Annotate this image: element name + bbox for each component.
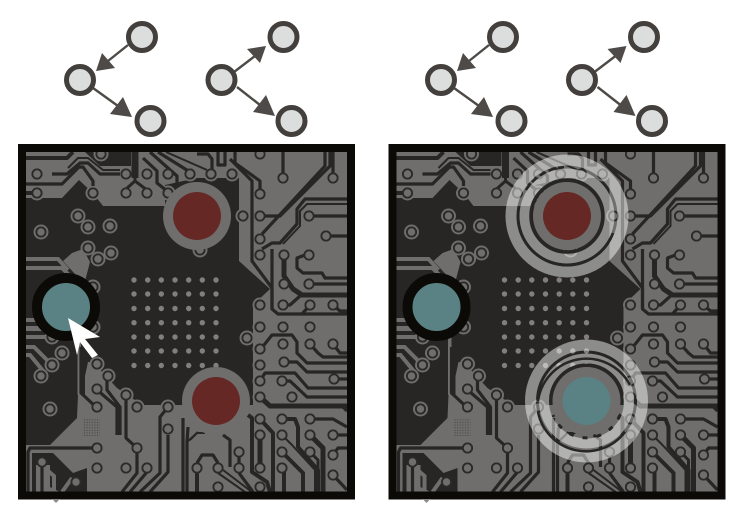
red pad top xyxy=(163,182,231,250)
pulse rings around teal pad xyxy=(530,345,642,457)
icon: white cursor arrow xyxy=(68,318,100,358)
icon: left node diagram B xyxy=(208,24,305,134)
icon: left node diagram A xyxy=(66,24,164,134)
icon: right node diagram A xyxy=(428,24,525,134)
icon: right node diagram B xyxy=(568,24,666,134)
panel: right circuit board xyxy=(388,144,726,503)
selected teal pad xyxy=(37,278,95,336)
panel: left circuit board xyxy=(18,144,355,503)
selected teal pad xyxy=(408,278,466,336)
pulse rings around red pad xyxy=(511,160,623,272)
red pad bottom xyxy=(182,367,250,435)
